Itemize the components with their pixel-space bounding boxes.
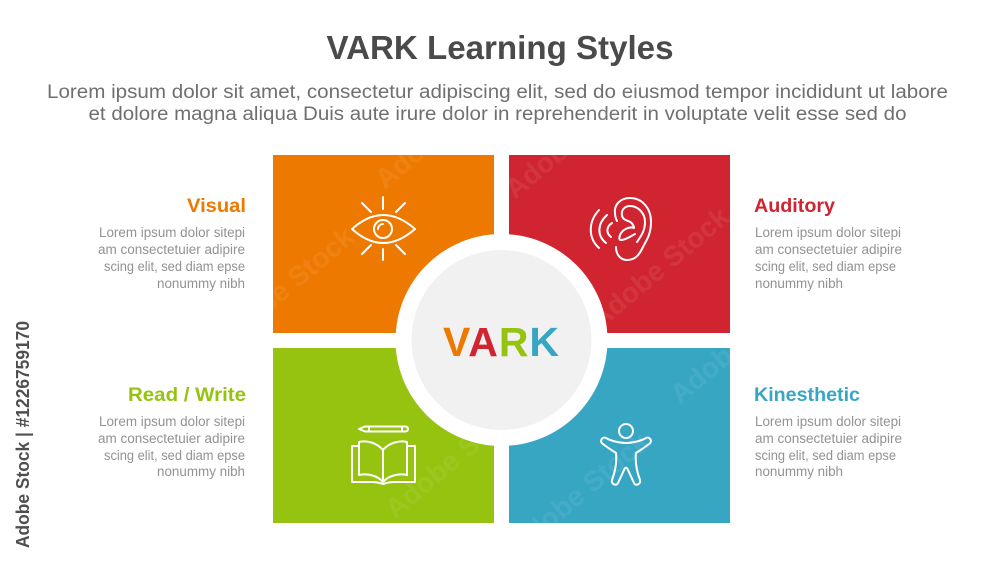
text block: Kinesthetic: Kinesthetic [754,385,860,406]
watermark on panels: Adobe Stock [499,71,650,205]
text block: Auditory: am consectetuier adipire [755,242,902,257]
icon: eye [352,197,415,260]
text block: Auditory: scing elit, sed diam epse [755,259,896,274]
text block: Read / Write: Read / Write [128,385,246,406]
text block: Auditory [754,196,902,291]
text block: Visual: Visual [187,196,246,217]
watermark on panels: Adobe Stock [209,221,360,355]
panel: kinesthetic quadrant [509,348,730,523]
watermark on panels: Adobe Stock [379,391,530,525]
text block: Kinesthetic: nonummy nibh [755,464,843,479]
text block: Visual: nonummy nibh [157,276,245,291]
text block: Auditory: Lorem ipsum dolor sitepi [755,225,901,240]
text block: Read / Write: am consectetuier adipire [98,431,245,446]
text block: Visual: scing elit, sed diam epse [104,259,245,274]
text block: Kinesthetic [754,385,902,479]
icon: person with raised arms [601,424,651,485]
center label: VARK: VARK [443,319,559,365]
text block: Kinesthetic: am consectetuier adipire [755,431,902,446]
panel: auditory quadrant [509,155,730,333]
subtitle [47,82,948,125]
watermark on panels: Adobe Stock [584,201,735,335]
subtitle: Lorem ipsum dolor sit amet, consectetur adipiscing elit, sed do eiusmod tempor incididunt ut labore [47,82,948,103]
text block: Visual: Lorem ipsum dolor sitepi [99,225,245,240]
center circle [396,234,608,446]
icon: ear [591,198,651,260]
text block: Read / Write: nonummy nibh [157,464,245,479]
icon: open book and pencil [352,426,415,484]
subtitle: et dolore magna aliqua Duis aute irure dolor in reprehenderit in voluptate velit esse sed do [88,104,906,125]
watermark on panels: Adobe Stock [664,276,815,410]
watermark on panels [209,61,815,560]
watermark on panels: Adobe Stock [369,61,520,195]
text block: Auditory: Auditory [754,196,835,217]
panel: read / write quadrant [273,348,494,523]
stock id side label: Adobe Stock | #1226759170 [13,321,33,548]
text block: Kinesthetic: Lorem ipsum dolor sitepi [755,414,901,429]
text block: Kinesthetic: scing elit, sed diam epse [755,448,896,463]
text block: Read / Write: Lorem ipsum dolor sitepi [99,414,245,429]
text block: Read / Write: scing elit, sed diam epse [104,448,245,463]
text block: Auditory: nonummy nibh [755,276,843,291]
text block: Visual: am consectetuier adipire [98,242,245,257]
text block: Visual [98,196,246,291]
watermark on panels: Adobe Stock [504,426,655,560]
panel: visual quadrant [273,155,494,333]
title: VARK Learning Styles [326,29,674,66]
text block: Read / Write [98,385,246,479]
